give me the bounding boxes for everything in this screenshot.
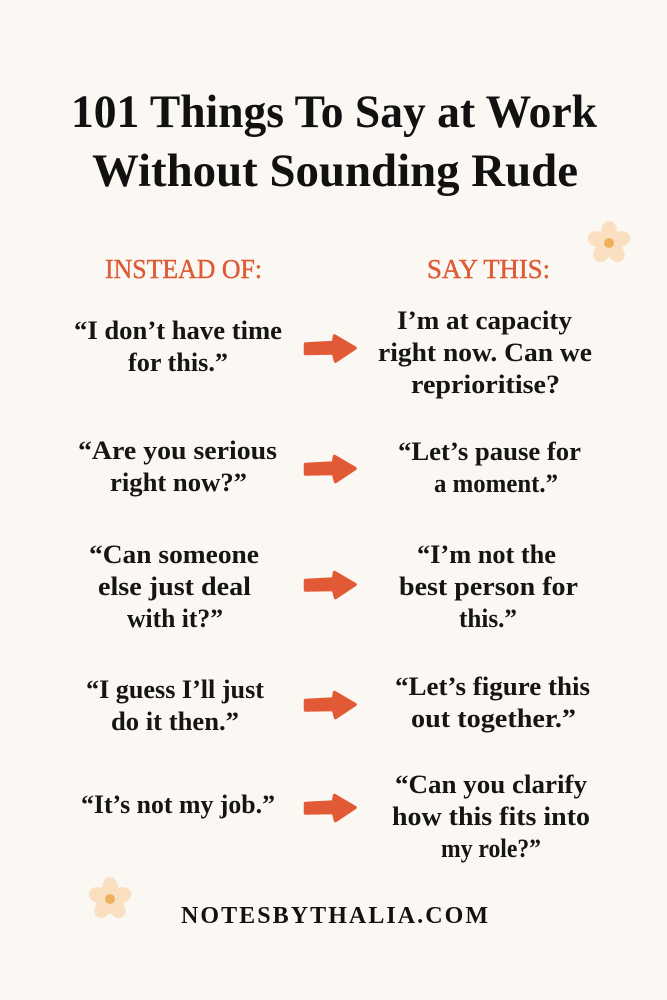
arrow 3	[306, 572, 355, 598]
arrow 2	[306, 456, 355, 482]
row 5 instead of: “It’s not my job.”	[81, 790, 275, 819]
row 1 instead of	[74, 316, 282, 377]
title: 101 Things To Say at Work	[71, 86, 598, 138]
row 5 say this: my role?”	[441, 834, 541, 863]
row 3 say this	[399, 540, 578, 633]
row 1 say this: right now. Can we	[378, 338, 592, 367]
row 4 instead of: “I guess I’ll just	[86, 675, 264, 704]
row 3 instead of	[89, 540, 259, 633]
row 4 say this: out together.”	[411, 704, 576, 733]
row 2 instead of	[78, 436, 277, 497]
heading: instead of: INSTEAD OF:	[105, 254, 262, 284]
row 1 say this	[378, 306, 592, 399]
title: Without Sounding Rude	[92, 145, 578, 197]
row 3 instead of: else just deal	[98, 572, 251, 601]
row 1 say this: reprioritise?	[411, 370, 560, 399]
row 2 instead of: right now?”	[110, 468, 247, 497]
row 3 say this: “I’m not the	[417, 540, 556, 569]
arrow 5	[306, 796, 355, 820]
row 2 say this	[398, 437, 581, 498]
row 5 say this	[392, 770, 590, 863]
row 2 instead of: “Are you serious	[78, 436, 277, 465]
title	[71, 86, 598, 197]
row 1 instead of: for this.”	[128, 348, 228, 377]
row 1 say this: I’m at capacity	[397, 306, 572, 335]
row 4 say this	[395, 672, 590, 733]
icon: flower bottom left	[87, 877, 133, 922]
row 2 say this: a moment.”	[434, 469, 558, 498]
row 3 instead of: “Can someone	[89, 540, 259, 569]
row 5 say this: how this fits into	[392, 802, 590, 831]
row 2 say this: “Let’s pause for	[398, 437, 581, 466]
row 4 instead of	[86, 675, 264, 736]
row 3 instead of: with it?”	[127, 604, 223, 633]
arrow 4	[306, 692, 355, 718]
row 1 instead of: “I don’t have time	[74, 316, 282, 345]
row 4 say this: “Let’s figure this	[395, 672, 590, 701]
row 4 instead of: do it then.”	[111, 707, 239, 736]
row 3 say this: best person for	[399, 572, 578, 601]
heading: say this: SAY THIS:	[427, 254, 550, 284]
arrow 1	[306, 336, 355, 361]
row 5 say this: “Can you clarify	[395, 770, 587, 799]
row 3 say this: this.”	[459, 604, 517, 633]
footer website: NOTESBYTHALIA.COM	[181, 903, 488, 929]
icon: flower top right	[586, 221, 632, 266]
